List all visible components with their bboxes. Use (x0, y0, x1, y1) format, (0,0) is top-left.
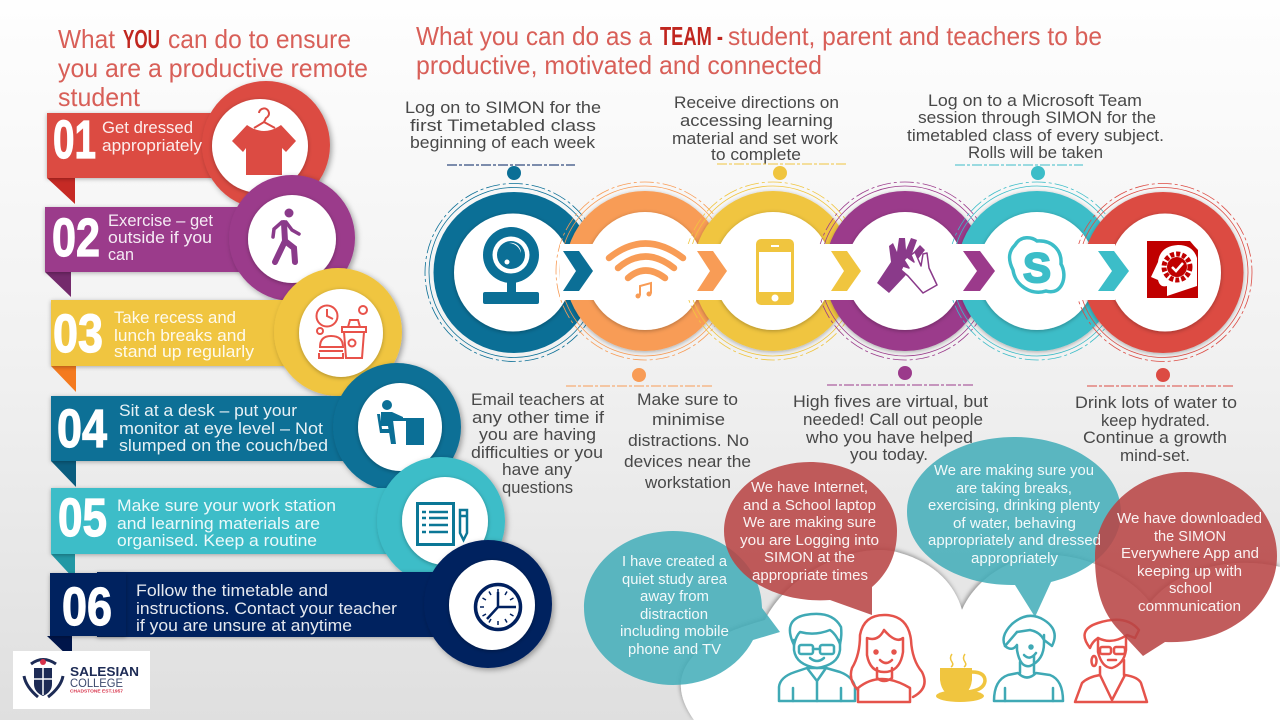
icon: man with quiff (994, 616, 1063, 701)
icon: clock (476, 584, 520, 630)
text: get dressed (102, 118, 203, 155)
text: step microsoft team: session through SIMON for the (918, 108, 1156, 127)
text: step drink water: Drink lots of water to (1075, 393, 1237, 412)
speech text: parent breaks and water (928, 463, 1101, 567)
speech text: parent internet and laptop: SIMON at the (764, 550, 855, 566)
icon: boy with glasses (779, 614, 855, 701)
text: timetable: Follow the timetable and (136, 581, 328, 600)
text: desk (119, 401, 328, 455)
speech text: teacher SIMON app: We have downloaded (1117, 511, 1262, 527)
text: step microsoft team (907, 91, 1164, 162)
text: step email teachers: any other time if (472, 408, 604, 427)
panel: step 04 desk (51, 363, 461, 491)
icon: woman with glasses (1075, 620, 1147, 702)
text: organise (117, 496, 336, 550)
text: desk: monitor at eye level – Not (119, 419, 323, 438)
text: step log on to SIMON: Log on to SIMON for the (405, 98, 601, 117)
text: get dressed: appropriately (102, 136, 203, 155)
text: breaks: lunch breaks and (114, 326, 246, 345)
speech text: student quiet study area: phone and TV (628, 642, 721, 658)
speech text: teacher SIMON app: communication (1138, 599, 1241, 615)
text: step drink water: Continue a growth (1083, 428, 1227, 447)
icon: list and pencil (418, 504, 467, 544)
text: step minimise distractions: workstation (644, 473, 731, 492)
speech text: parent internet and laptop: you are Logging into (740, 533, 879, 549)
speech text: student quiet study area: away from (640, 589, 709, 605)
text: timetable: instructions. Contact your teacher (136, 599, 397, 618)
text: breaks: stand up regularly (114, 342, 255, 361)
logo: Salesian College: CHADSTONE EST.1957 (70, 688, 124, 694)
text: step high fives: who you have helped (805, 428, 973, 447)
heading: what you can do: you are a productive remote (58, 53, 368, 83)
heading: what you can do: can do to ensure (168, 24, 351, 54)
logo: Salesian College (13, 651, 150, 709)
heading: what you can do as a team (416, 21, 1102, 80)
speech text: parent internet and laptop (740, 480, 879, 584)
heading: what you can do: What (58, 24, 116, 54)
text: exercise: outside if you (108, 228, 212, 247)
text: step receive directions (672, 93, 839, 164)
icon: wifi and music note (609, 244, 683, 298)
ring: purple hands (816, 182, 994, 360)
heading: what you can do as a team: productive, motivated and connected (416, 50, 822, 80)
speech text: parent breaks and water: appropriately and dressed (928, 533, 1101, 549)
text: step receive directions: material and set work (672, 129, 839, 148)
icon: skype logo (1009, 238, 1064, 292)
heading: what you can do: student (58, 82, 141, 112)
speech text: teacher SIMON app (1117, 511, 1262, 615)
icon: t-shirt on hanger (232, 108, 296, 175)
text: step high fives: you today. (850, 445, 928, 464)
number 01: 01 (53, 110, 96, 170)
text: exercise (108, 211, 213, 264)
icon: walking person (273, 208, 299, 262)
text: step receive directions: to complete (711, 145, 801, 164)
icon: high five hands (877, 238, 937, 293)
number 03: 03 (53, 304, 103, 364)
text: desk: Sit at a desk – put your (119, 401, 297, 420)
logo: Salesian College: SALESIAN (70, 664, 139, 679)
speech text: student quiet study area: distraction (640, 607, 708, 623)
arrow: chevrons between rings (563, 251, 1129, 291)
text: step log on to SIMON (405, 98, 601, 152)
text: step email teachers: questions (502, 478, 573, 497)
text: step email teachers: Email teachers at (471, 390, 604, 409)
text: step high fives: needed! Call out people (803, 410, 983, 429)
text: step receive directions: accessing learning (680, 111, 833, 130)
text: timetable (136, 581, 397, 635)
text: step microsoft team: timetabled class of every subject. (907, 126, 1164, 145)
panel: step 06 timetable (47, 540, 552, 668)
heading: what you can do as a team: What you can do as a (416, 21, 653, 51)
text: exercise: Exercise – get (108, 211, 213, 230)
speech text: teacher SIMON app: keeping up with (1137, 564, 1242, 580)
logo: Salesian College: COLLEGE (70, 676, 123, 690)
text: organise: and learning materials are (117, 514, 320, 533)
icon: skype logo: S (1023, 244, 1051, 291)
ring: blue webcam (425, 184, 603, 362)
text: step drink water: mind-set. (1120, 446, 1190, 465)
text: step email teachers: you are having (479, 425, 596, 444)
number 02: 02 (52, 208, 100, 268)
speech text: parent internet and laptop: We have Internet, (751, 480, 868, 496)
speech text: parent breaks and water: of water, behaving (953, 516, 1076, 532)
icon: person at desk (377, 400, 424, 445)
ring: red mindset (1074, 184, 1252, 362)
text: step microsoft team: Log on to a Microsoft Team (928, 91, 1142, 110)
speech text: parent internet and laptop: appropriate times (752, 568, 868, 584)
speech text: parent breaks and water: exercising, drinking plenty (928, 498, 1101, 514)
text: desk: slumped on the couch/bed (119, 436, 328, 455)
text: step receive directions: Receive directions on (674, 93, 839, 112)
ring: orange wifi (556, 182, 734, 360)
panel: step 01 get dressed (47, 81, 330, 209)
speech text: parent internet and laptop: and a School laptop (743, 498, 876, 514)
speech text: parent internet and laptop: We are making sure (743, 515, 876, 531)
text: breaks: Take recess and (114, 308, 236, 327)
text: step minimise distractions: Make sure to (637, 390, 738, 409)
heading: what you can do as a team: TEAM - (660, 21, 723, 51)
text: organise: Make sure your work station (117, 496, 336, 515)
speech text: teacher SIMON app: Everywhere App and (1121, 546, 1259, 562)
icon: mobile phone (756, 239, 794, 305)
white cloud background (681, 550, 1280, 720)
text: breaks (114, 308, 255, 361)
speech text: parent breaks and water: We are making sure you (934, 463, 1094, 479)
speech text: student quiet study area: quiet study area (622, 572, 728, 588)
text: step drink water (1075, 393, 1237, 465)
panel: step 02 exercise (45, 175, 355, 301)
text: get dressed: Get dressed (102, 118, 193, 137)
speech text: teacher SIMON app: the SIMON (1154, 529, 1226, 545)
text: step minimise distractions: distractions. No (628, 431, 749, 450)
number 05: 05 (58, 488, 107, 548)
number 04: 04 (57, 399, 107, 459)
text: step minimise distractions (624, 390, 751, 492)
text: step high fives: High fives are virtual, but (793, 392, 988, 411)
text: step minimise distractions: devices near the (624, 452, 751, 471)
text: step email teachers (471, 390, 604, 497)
icon: growth mindset head (1147, 241, 1198, 298)
callout markers: top and bottom dots with dashed lines (447, 164, 1235, 386)
speech text: student quiet study area: including mobile (620, 624, 729, 640)
speech text: parent breaks and water: appropriately (971, 551, 1059, 567)
speech text: teacher SIMON app: school (1169, 581, 1212, 597)
panel: step 05 organise (51, 457, 505, 585)
text: timetable: if you are unsure at anytime (136, 616, 352, 635)
icon: girl with long hair (851, 615, 925, 702)
heading: what you can do: YOU (123, 24, 160, 54)
text: step log on to SIMON: beginning of each week (410, 133, 596, 152)
number 06: 06 (62, 577, 112, 637)
ring: teal skype (948, 182, 1126, 360)
speech text: student quiet study area (620, 554, 729, 658)
text: step high fives (793, 392, 988, 464)
speech text: parent breaks and water: are taking breaks, (956, 481, 1072, 497)
heading: what you can do (58, 24, 368, 112)
heading: what you can do as a team: student, parent and teachers to be (728, 21, 1102, 51)
speech text: student quiet study area: I have created a (622, 554, 728, 570)
white band linking rings (560, 244, 1115, 300)
text: exercise: can (108, 245, 134, 264)
text: step microsoft team: Rolls will be taken (968, 143, 1103, 162)
text: step email teachers: difficulties or you (471, 443, 603, 462)
panel: step 03 breaks (51, 268, 402, 396)
text: step email teachers: have any (502, 460, 573, 479)
text: step minimise distractions: minimise (652, 410, 725, 429)
icon: coffee cup (936, 654, 985, 702)
icon: food and clock (316, 306, 367, 358)
speech bubble shapes (584, 437, 1277, 685)
ring: yellow phone (684, 182, 862, 360)
text: step drink water: keep hydrated. (1101, 411, 1210, 430)
icon: webcam (483, 227, 539, 304)
text: organise: organised. Keep a routine (117, 531, 317, 550)
text: step log on to SIMON: first Timetabled class (410, 116, 596, 135)
